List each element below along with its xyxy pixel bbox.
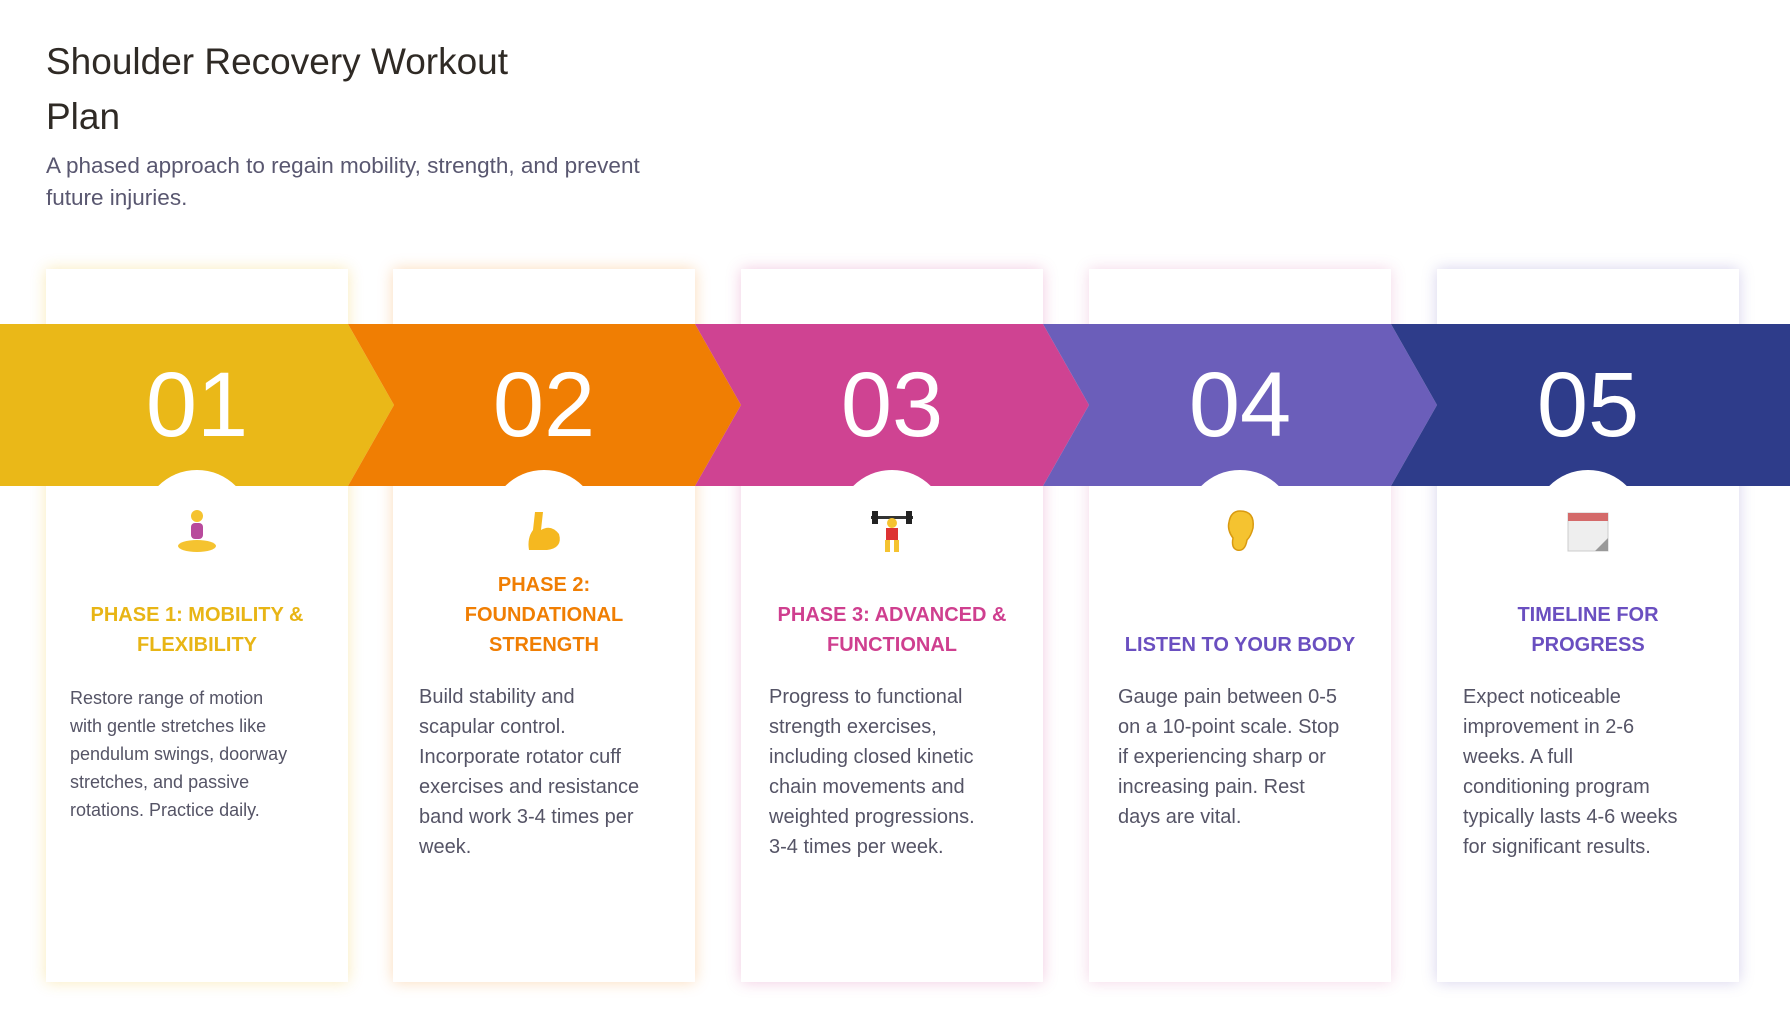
number 01: 01 — [146, 354, 248, 456]
subtitle: future injuries. — [46, 185, 187, 210]
heading 2: FOUNDATIONAL — [465, 604, 623, 626]
heading 2: PHASE 2: — [498, 574, 590, 596]
body 2: exercises and resistance — [419, 776, 639, 798]
body 5: for significant results. — [1463, 836, 1651, 858]
body 5 — [1463, 686, 1678, 858]
icon: weightlifter — [871, 511, 913, 552]
chevron band — [0, 324, 1790, 486]
card 3 background — [741, 269, 1043, 982]
heading 3: PHASE 3: ADVANCED & FUNCTIONAL — [778, 604, 1006, 656]
bump 2 — [489, 470, 599, 580]
title: Shoulder Recovery Workout — [46, 41, 508, 82]
icon: meditation — [178, 510, 216, 552]
icon: calendar — [1568, 512, 1608, 552]
body 5: weeks. A full — [1463, 746, 1573, 768]
bump 5 — [1533, 470, 1643, 580]
card 4 background — [1089, 269, 1391, 982]
body 5: improvement in 2-6 — [1463, 716, 1634, 738]
body 3: strength exercises, — [769, 716, 937, 738]
body 2 — [419, 686, 639, 858]
body 3: chain movements and — [769, 776, 965, 798]
body 3: weighted progressions. — [769, 806, 975, 828]
heading 5: TIMELINE FOR — [1517, 604, 1659, 626]
number 03: 03 — [841, 354, 943, 456]
number 05: 05 — [1537, 354, 1639, 456]
body 5: typically lasts 4-6 weeks — [1463, 806, 1678, 828]
body 2: Build stability and — [419, 686, 575, 708]
title — [46, 41, 508, 137]
card 5 background — [1437, 269, 1739, 982]
heading 4: LISTEN TO YOUR BODY — [1125, 634, 1355, 656]
heading 2: STRENGTH — [489, 634, 599, 656]
bump 3 — [837, 470, 947, 580]
body 2: Incorporate rotator cuff — [419, 746, 621, 768]
heading 1: PHASE 1: MOBILITY & FLEXIBILITY — [90, 604, 304, 656]
body 3: 3-4 times per week. — [769, 836, 944, 858]
body 3 — [769, 686, 975, 858]
body 4: if experiencing sharp or — [1118, 746, 1326, 768]
heading 5: PROGRESS — [1531, 634, 1645, 656]
number 02: 02 — [493, 354, 595, 456]
heading 5 — [1517, 604, 1659, 656]
body 3: including closed kinetic — [769, 746, 974, 768]
icon: flexed bicep — [528, 512, 560, 550]
body 3: Progress to functional — [769, 686, 962, 708]
card 2 background — [393, 269, 695, 982]
body 4: Gauge pain between 0-5 — [1118, 686, 1337, 708]
card 1 background — [46, 269, 348, 982]
number 04: 04 — [1189, 354, 1291, 456]
body 4: days are vital. — [1118, 806, 1241, 828]
body 5: conditioning program — [1463, 776, 1650, 798]
body 1: pendulum swings, doorway — [70, 744, 287, 764]
body 1: rotations. Practice daily. — [70, 800, 260, 820]
icon: ear — [1228, 510, 1254, 551]
body 4: increasing pain. Rest — [1118, 776, 1305, 798]
body 1 — [70, 688, 288, 820]
body 4 — [1118, 686, 1339, 828]
heading 2 — [465, 574, 623, 656]
subtitle: A phased approach to regain mobility, strength, and prevent — [46, 153, 640, 178]
body 5: Expect noticeable — [1463, 686, 1621, 708]
body 2: band work 3-4 times per — [419, 806, 634, 828]
bump 4 — [1185, 470, 1295, 580]
subtitle — [46, 153, 640, 210]
body 4: on a 10-point scale. Stop — [1118, 716, 1339, 738]
body 2: scapular control. — [419, 716, 566, 738]
body 1: Restore range of motion — [70, 688, 263, 708]
title: Plan — [46, 96, 120, 137]
body 1: stretches, and passive — [70, 772, 249, 792]
body 2: week. — [419, 836, 471, 858]
body 1: with gentle stretches like — [70, 716, 266, 736]
bump 1 — [142, 470, 252, 580]
